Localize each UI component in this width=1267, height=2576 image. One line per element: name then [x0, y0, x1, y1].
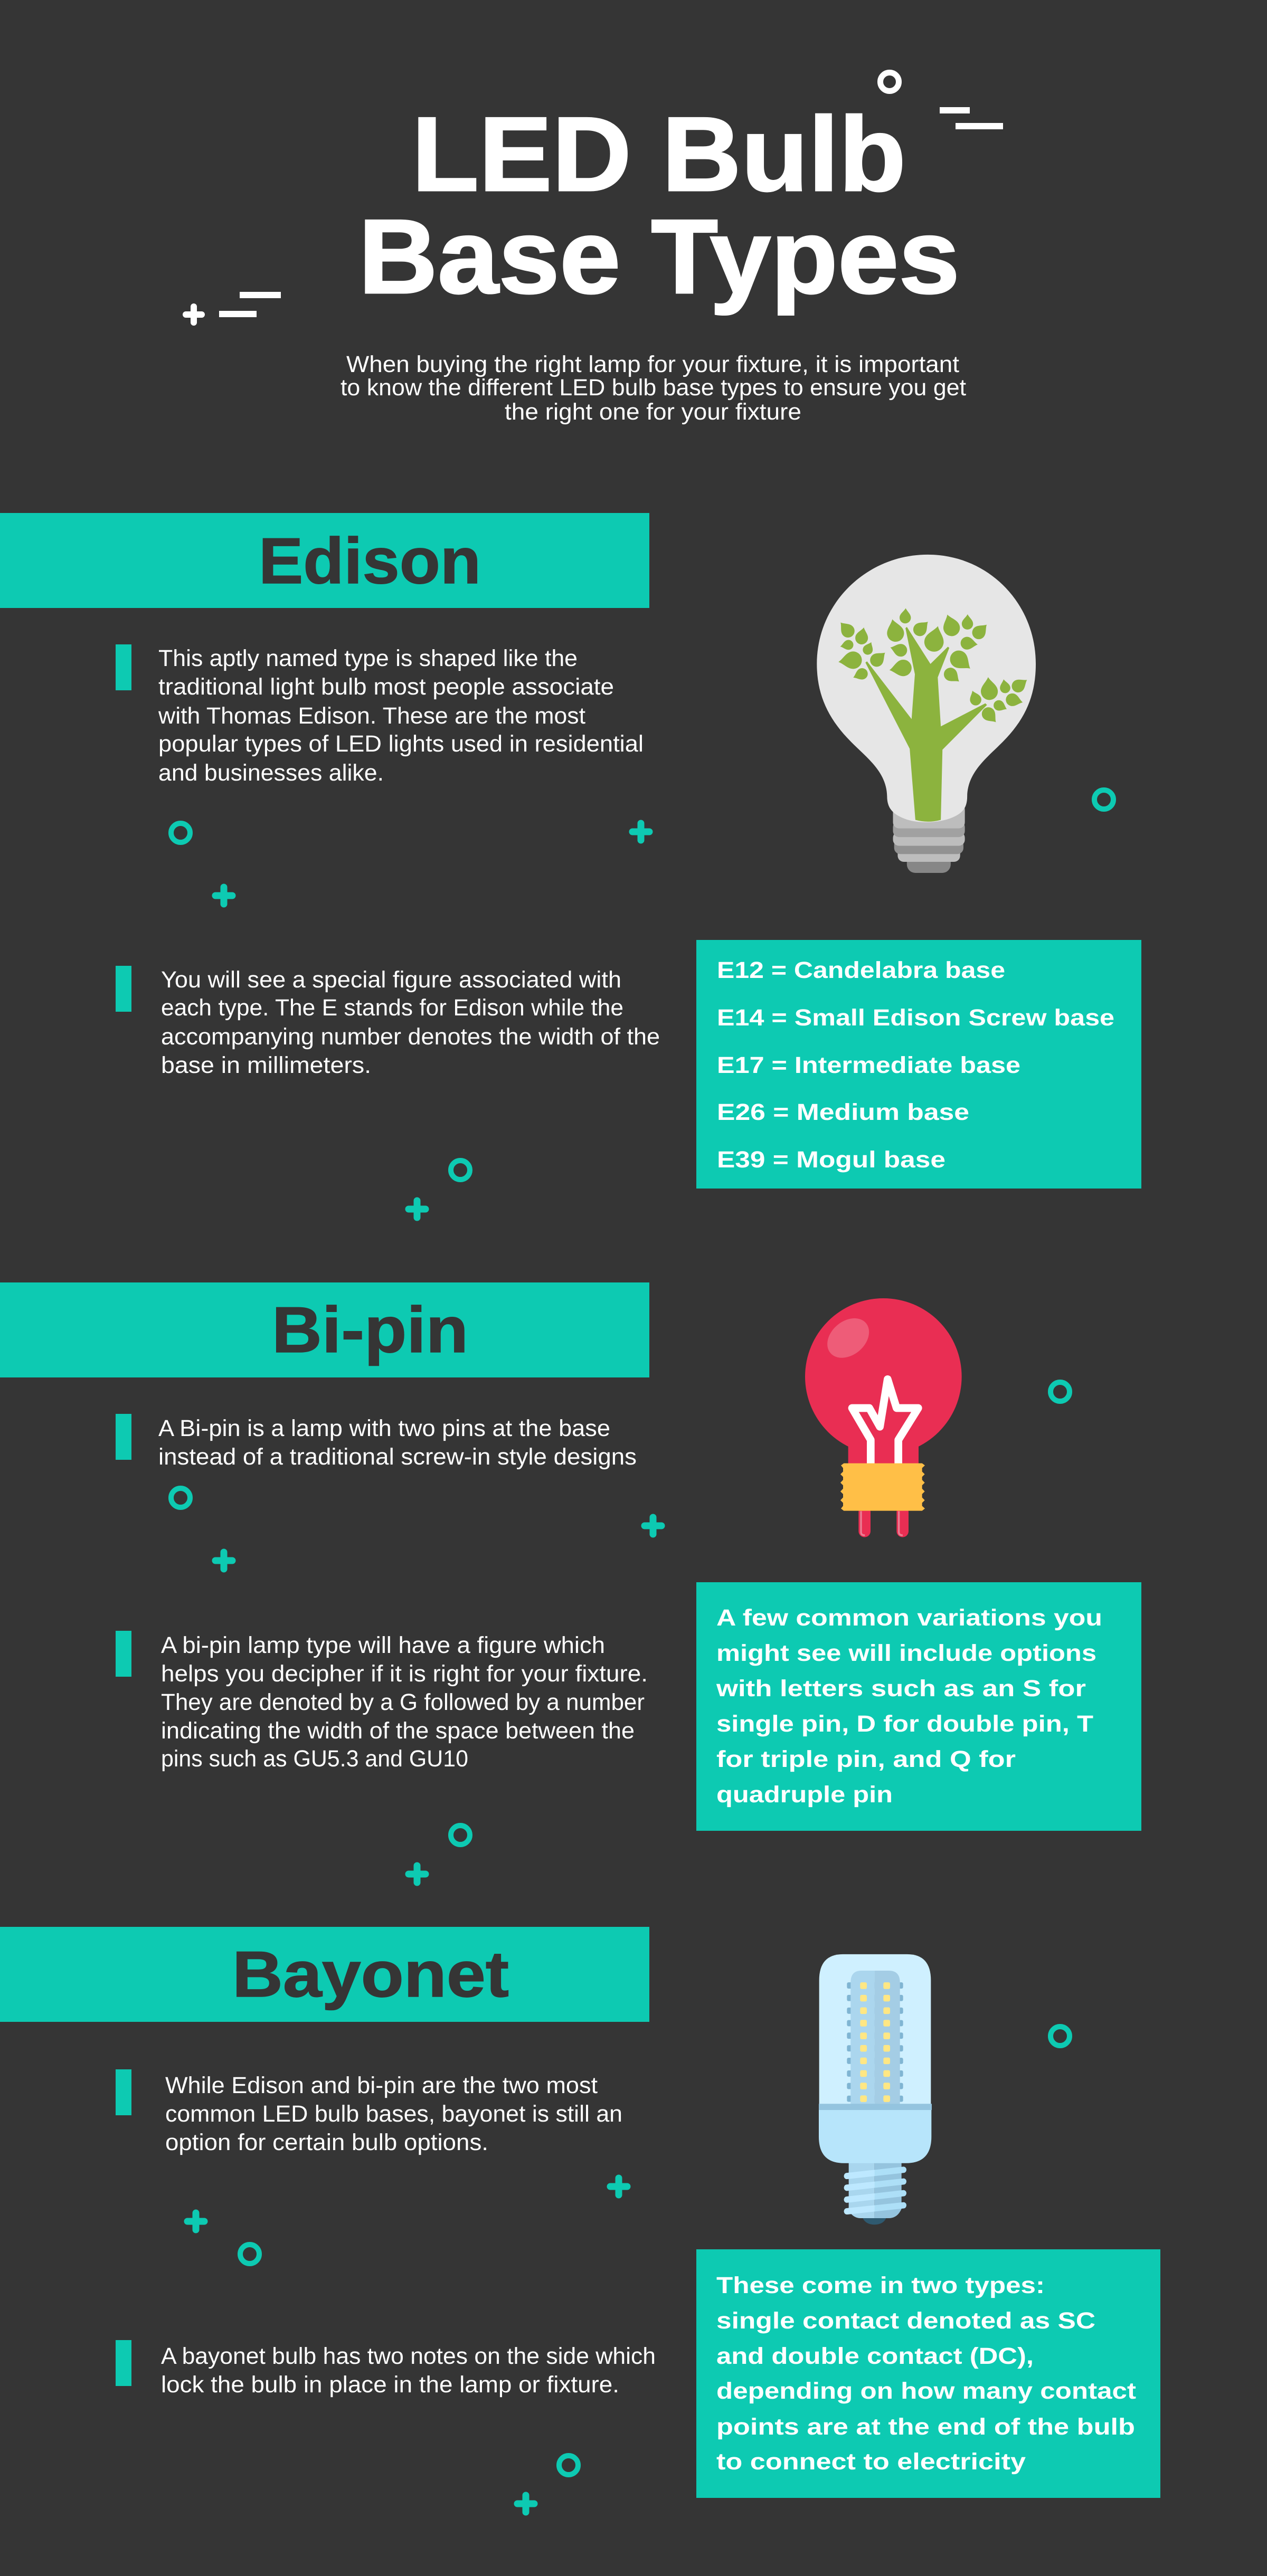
- callout: E base sizes: E12 = Candelabra base: [717, 957, 1005, 983]
- callout: Bayonet contact types: and double contact (DC),: [716, 2343, 1034, 2369]
- title: [358, 96, 960, 316]
- header decorations: [186, 73, 1003, 322]
- callout: E base sizes: E26 = Medium base: [717, 1099, 969, 1125]
- Bayonet text block 1: common LED bulb bases, bayonet is still an: [165, 2101, 622, 2127]
- callout: Bayonet contact types: single contact denoted as SC: [716, 2308, 1095, 2334]
- title: Base Types: [358, 198, 960, 316]
- Edison heading band: Edison: [259, 525, 481, 597]
- Bi-pin lower decorations: [409, 1826, 470, 1883]
- Edison text block 2: [116, 966, 660, 1078]
- callout: Bi-pin variations: [696, 1582, 1141, 1831]
- icon: Edison bulb with tree: [817, 555, 1036, 873]
- Bi-pin text block 2: helps you decipher if it is right for your fixture.: [161, 1661, 648, 1687]
- Edison text block 1: traditional light bulb most people associate: [158, 674, 614, 700]
- Edison lower decorations: [409, 1161, 470, 1218]
- callout: Bayonet contact types: depending on how many contact: [716, 2378, 1136, 2404]
- callout: Bi-pin variations: A few common variations you: [716, 1605, 1102, 1631]
- Edison heading band: [0, 513, 649, 608]
- Bi-pin decorations: [171, 1382, 1070, 1569]
- Bayonet heading band: [0, 1927, 649, 2022]
- Bi-pin text block 1: instead of a traditional screw-in style designs: [158, 1444, 637, 1470]
- Edison text block 1: with Thomas Edison. These are the most: [158, 703, 585, 729]
- callout: E base sizes: E17 = Intermediate base: [717, 1052, 1020, 1078]
- Edison text block 1: This aptly named type is shaped like the: [158, 645, 578, 671]
- icon: red bi-pin bulb: [805, 1298, 962, 1537]
- Bayonet text block 1: option for certain bulb options.: [165, 2130, 488, 2155]
- callout: Bi-pin variations: with letters such as an S for: [716, 1676, 1086, 1702]
- Bayonet text block 1: [116, 2069, 622, 2155]
- panel: Bayonet: [0, 1927, 1160, 2512]
- Edison text block 2: base in millimeters.: [161, 1052, 371, 1078]
- Bi-pin text block 2: indicating the width of the space between the: [161, 1718, 635, 1744]
- Bayonet decorations: [187, 2027, 1070, 2264]
- Bi-pin heading band: Bi-pin: [272, 1294, 468, 1366]
- callout: Bi-pin variations: single pin, D for double pin, T: [716, 1711, 1093, 1737]
- callout: Bayonet contact types: points are at the end of the bulb: [716, 2414, 1135, 2440]
- Bi-pin text block 2: [116, 1631, 648, 1772]
- Bayonet text block 1: While Edison and bi-pin are the two most: [165, 2073, 598, 2098]
- callout: Bayonet contact types: to connect to electricity: [716, 2449, 1026, 2475]
- Bi-pin heading band: [0, 1282, 649, 1377]
- panel: Edison: [0, 513, 1141, 1218]
- Bayonet heading band: Bayonet: [232, 1938, 509, 2011]
- callout: Bayonet contact types: These come in two types:: [716, 2273, 1045, 2298]
- intro text: the right one for your fixture: [505, 399, 801, 425]
- intro text: When buying the right lamp for your fixture, it is important: [346, 351, 959, 377]
- Bayonet text block 2: A bayonet bulb has two notes on the side which: [161, 2343, 656, 2369]
- Edison text block 2: accompanying number denotes the width of the: [161, 1024, 660, 1050]
- callout: E base sizes: E39 = Mogul base: [717, 1147, 945, 1173]
- intro text: to know the different LED bulb base types to ensure you get: [341, 375, 966, 401]
- callout: E base sizes: [696, 940, 1141, 1189]
- Bi-pin text block 2: A bi-pin lamp type will have a figure which: [161, 1632, 605, 1658]
- Edison text block 1: and businesses alike.: [158, 760, 384, 786]
- Bi-pin text block 1: A Bi-pin is a lamp with two pins at the base: [158, 1415, 610, 1441]
- icon: blue corn bulb: [819, 1954, 932, 2225]
- callout: Bi-pin variations: for triple pin, and Q for: [716, 1746, 1016, 1772]
- Edison text block 2: each type. The E stands for Edison while the: [161, 995, 623, 1021]
- Edison text block 1: popular types of LED lights used in residential: [158, 731, 644, 757]
- panel: Bi-pin: [0, 1282, 1141, 1883]
- callout: Bi-pin variations: might see will include options: [716, 1640, 1096, 1666]
- Bayonet lower decorations: [517, 2456, 578, 2512]
- callout: Bi-pin variations: quadruple pin: [716, 1782, 893, 1808]
- intro text: [341, 351, 966, 425]
- title: LED Bulb: [412, 96, 906, 213]
- Bi-pin text block 2: They are denoted by a G followed by a number: [161, 1689, 645, 1715]
- Bi-pin text block 2: pins such as GU5.3 and GU10: [161, 1746, 468, 1772]
- Bayonet text block 2: lock the bulb in place in the lamp or fixture.: [161, 2372, 619, 2398]
- callout: E base sizes: E14 = Small Edison Screw base: [717, 1005, 1114, 1031]
- Edison text block 2: You will see a special figure associated with: [161, 967, 621, 993]
- Edison decorations: [171, 790, 1113, 904]
- Bi-pin text block 1: [116, 1414, 637, 1470]
- Bayonet text block 2: [116, 2340, 656, 2398]
- callout: Bayonet contact types: [696, 2249, 1160, 2498]
- Edison text block 1: [116, 644, 644, 786]
